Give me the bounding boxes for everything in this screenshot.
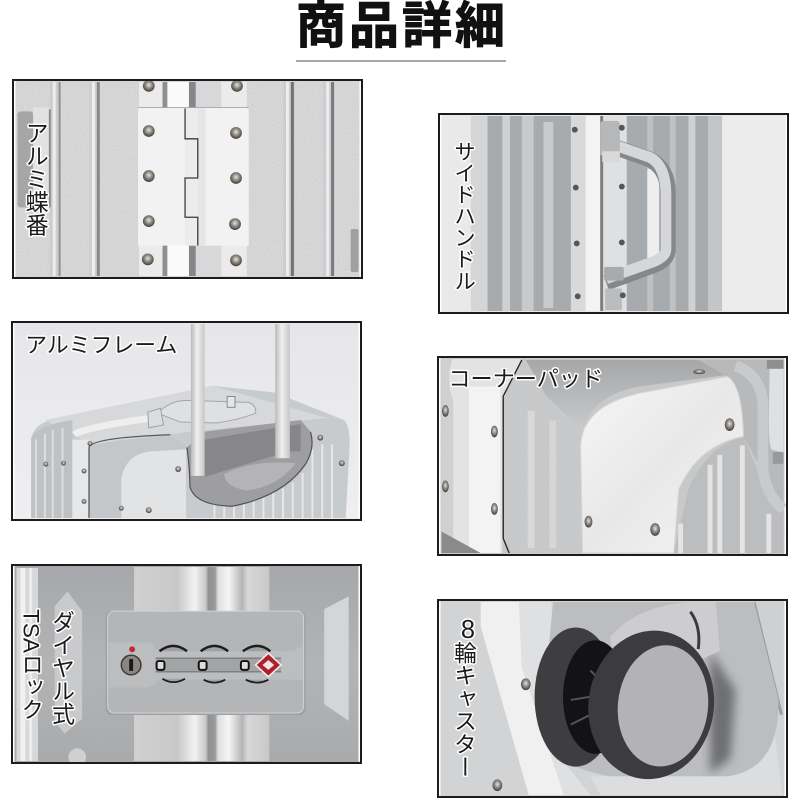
case ribs: [17, 82, 359, 276]
title underline: [296, 60, 506, 62]
panel: corner pad: [437, 356, 788, 556]
case frame: [481, 602, 783, 795]
centre frame: [571, 116, 659, 311]
panel: TSA lock: [11, 564, 362, 764]
centre frame rails: [134, 567, 269, 761]
case ribs: [471, 116, 722, 311]
top handle: [148, 396, 256, 428]
panel: side handle: [438, 113, 789, 314]
label: dial type: ダイヤル式: [49, 610, 75, 725]
icon: rivets: [572, 125, 626, 299]
icon: side handle: [600, 121, 668, 310]
right raised area: [324, 596, 349, 721]
recess: [187, 420, 312, 506]
icon: TSA lock: [106, 611, 306, 715]
icon: rear wheel: [535, 627, 628, 767]
caster arm: [610, 602, 720, 661]
icon: rivets: [142, 80, 243, 266]
label: 8-wheel casters: 8: [461, 616, 475, 644]
icon: corner pad: [581, 377, 743, 553]
panel: 8-wheel casters: [437, 599, 788, 798]
label: aluminium frame: アルミフレーム: [25, 332, 177, 357]
right frame: [698, 360, 784, 509]
side frame: [441, 359, 522, 553]
panel: aluminium frame: [11, 321, 362, 521]
label: 8-wheel casters: 輪キャスター: [451, 641, 477, 778]
panel: hinge: [12, 79, 363, 279]
label: hinge: アルミ蝶番: [22, 121, 49, 237]
left stripes: [16, 568, 86, 766]
suitcase body: [31, 386, 350, 518]
label: TSA lock: TSAロック: [19, 609, 44, 721]
label: side handle: サイドハンドル: [452, 140, 477, 291]
icon: rivets: [43, 435, 345, 513]
icon: rivets: [442, 369, 735, 536]
label: corner pad: コーナーパッド: [448, 366, 603, 391]
wheel well: [549, 602, 779, 776]
icon: trolley poles: [191, 324, 290, 476]
panel shading: [526, 360, 737, 548]
centre frame rail: [139, 82, 247, 276]
icon: front wheel: [579, 622, 724, 787]
well shadow: [710, 651, 735, 773]
lower right case: [674, 436, 784, 553]
well lip: [590, 734, 783, 795]
icon: hinge plate: [138, 107, 249, 246]
